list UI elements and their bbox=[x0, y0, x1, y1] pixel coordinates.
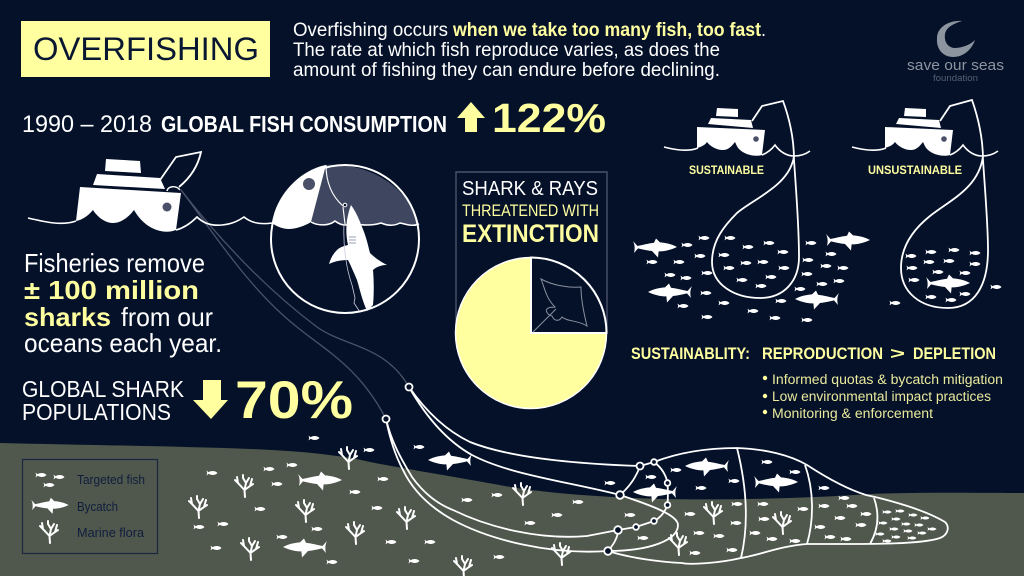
legend bbox=[22, 460, 158, 554]
intro text: Overfishing occurs bbox=[293, 20, 448, 41]
sustainability heading: REPRODUCTION bbox=[762, 344, 883, 363]
consumption statistic: GLOBAL FISH CONSUMPTION bbox=[161, 111, 447, 137]
fisheries text bbox=[24, 248, 222, 358]
shark population statistic bbox=[22, 371, 353, 430]
legend: bycatch: Bycatch bbox=[77, 499, 118, 514]
net outline bbox=[712, 101, 799, 298]
ring chain bbox=[618, 462, 668, 530]
logo crescent bbox=[937, 21, 975, 57]
flora bbox=[235, 475, 253, 497]
crane bbox=[160, 152, 201, 187]
icon: down arrow bbox=[193, 380, 228, 419]
grey lines from boat to net bbox=[181, 190, 409, 419]
unsustainable boat and net bbox=[852, 100, 998, 308]
legend: targeted fish: Targeted fish bbox=[77, 472, 145, 487]
fisheries text: from our bbox=[121, 302, 213, 332]
sky bbox=[311, 165, 419, 225]
sustainable boat and net bbox=[664, 101, 810, 298]
fisheries text: Fisheries remove bbox=[24, 248, 205, 278]
sharks bbox=[633, 238, 677, 258]
circle: shark on hook bbox=[271, 165, 419, 313]
label: sustainable: SUSTAINABLE bbox=[689, 163, 764, 177]
sharks bbox=[298, 472, 342, 490]
net ribs bbox=[737, 448, 877, 558]
water line bbox=[311, 221, 419, 225]
hook line bbox=[326, 165, 345, 224]
net catch: sharks bbox=[633, 458, 798, 502]
sustainability bullet list bbox=[763, 372, 1003, 421]
rings bbox=[406, 384, 412, 390]
consumption statistic: 122% bbox=[492, 95, 606, 141]
fish school: unsustainable bbox=[890, 248, 1002, 305]
net outline bbox=[901, 100, 988, 308]
water line bbox=[28, 217, 272, 230]
sustainability heading bbox=[631, 344, 996, 363]
label: unsustainable: UNSUSTAINABLE bbox=[868, 163, 962, 177]
seabed bbox=[0, 443, 1024, 576]
sustainability bullet list: Informed quotas & bycatch mitigation bbox=[772, 372, 1003, 387]
shark population statistic: POPULATIONS bbox=[22, 399, 171, 425]
sustainability heading: > bbox=[890, 344, 905, 363]
logo bbox=[907, 21, 1004, 84]
fish school: sustainable bbox=[633, 232, 870, 322]
shark bbox=[329, 205, 387, 311]
panel: shark and rays threatened: SHARK & RAYS bbox=[462, 178, 598, 200]
fisheries text: oceans each year. bbox=[24, 328, 222, 358]
consumption statistic: 1990 – 2018 bbox=[22, 111, 152, 138]
logo: save our seas bbox=[907, 57, 1004, 74]
sustainability heading: SUSTAINABLITY: bbox=[631, 344, 750, 363]
intro text: amount of fishing they can endure before declining. bbox=[293, 60, 720, 81]
sustainability bullet list: Monitoring & enforcement bbox=[772, 406, 933, 421]
hull section bbox=[272, 165, 326, 229]
fisheries text: ± 100 million bbox=[24, 275, 199, 305]
trawl net bbox=[382, 384, 948, 564]
icon: up arrow bbox=[457, 102, 485, 132]
icon: ray bbox=[533, 279, 587, 332]
sustainability heading: DEPLETION bbox=[913, 344, 996, 363]
net body bbox=[608, 448, 948, 564]
legend: marine flora: Marine flora bbox=[77, 525, 145, 540]
panel: shark and rays threatened: THREATENED WITH bbox=[462, 201, 599, 220]
title bbox=[21, 21, 270, 77]
panel: shark and rays threatened bbox=[456, 172, 607, 408]
panel: shark and rays threatened: EXTINCTION bbox=[462, 220, 599, 248]
consumption statistic bbox=[22, 95, 606, 141]
intro text: The rate at which fish reproduce varies, as does the bbox=[293, 40, 720, 61]
sustainability bullet list: Low environmental impact practices bbox=[772, 389, 991, 404]
net catch: fish bbox=[604, 460, 936, 555]
seabed fish and flora bbox=[189, 436, 791, 576]
tow lines bbox=[409, 387, 640, 466]
shark population statistic: 70% bbox=[235, 371, 353, 430]
pie chart bbox=[456, 258, 606, 408]
fisheries text: sharks bbox=[24, 302, 111, 332]
intro text: . bbox=[761, 20, 766, 41]
intro text bbox=[293, 20, 766, 81]
title: OVERFISHING bbox=[33, 31, 259, 67]
fishing boat left bbox=[28, 152, 272, 232]
intro text: when we take too many fish, too fast bbox=[452, 20, 762, 41]
shark bbox=[926, 274, 970, 294]
shark population statistic: GLOBAL SHARK bbox=[22, 376, 185, 402]
logo: foundation bbox=[933, 73, 978, 84]
